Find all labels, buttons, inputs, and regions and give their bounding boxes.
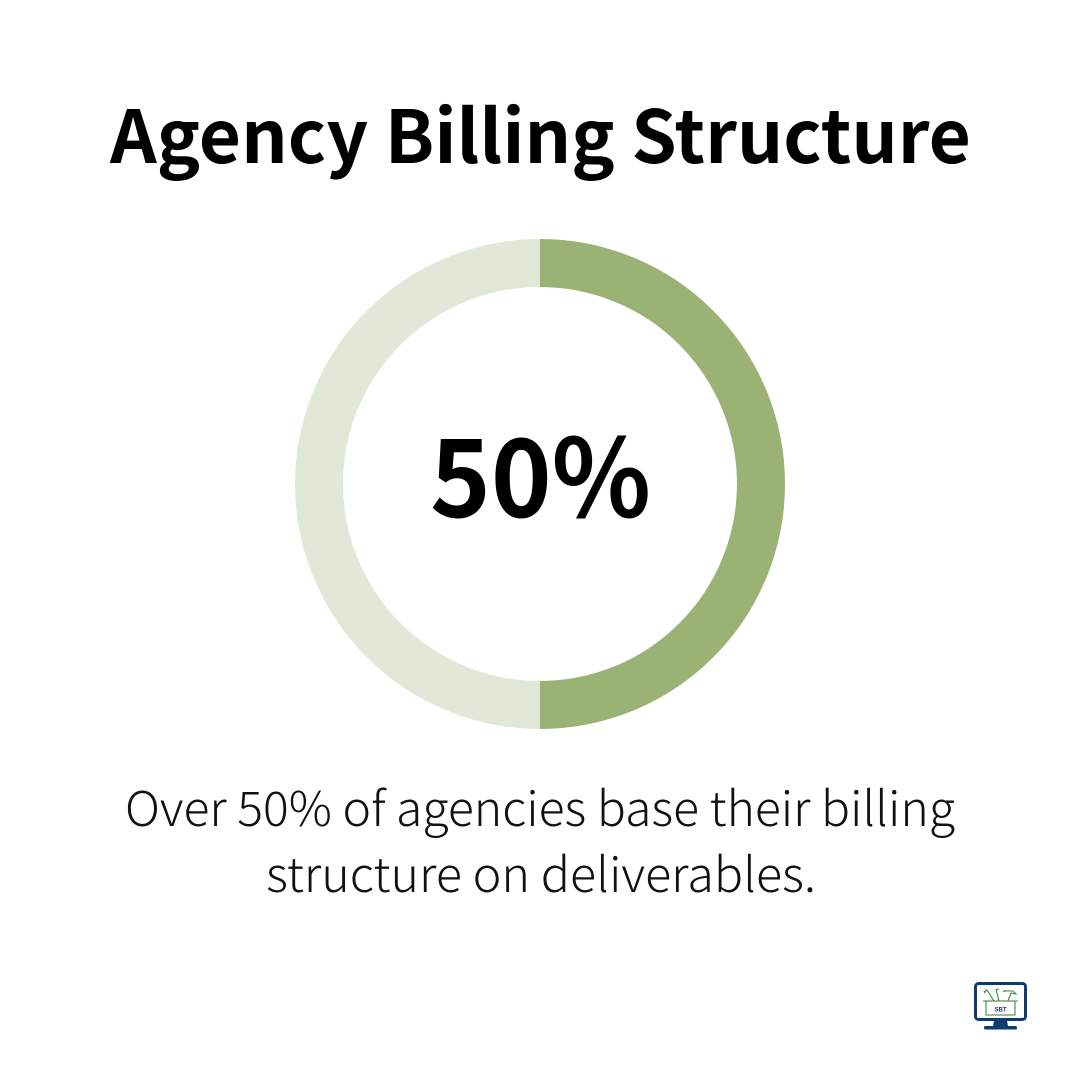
logo text: SBT — [994, 1008, 1007, 1014]
description text: Over 50% of agencies base their billing — [125, 770, 955, 840]
center value: 50% — [430, 393, 651, 549]
donut chart — [319, 263, 761, 705]
icon: computer monitor with toolbox logo — [976, 984, 1026, 1030]
toolbox — [983, 989, 1018, 1015]
description text: structure on deliverables. — [266, 836, 816, 906]
donut value arc: 50% — [540, 263, 761, 705]
description text — [125, 770, 955, 906]
title: Agency Billing Structure — [109, 79, 971, 185]
donut track — [319, 263, 761, 705]
